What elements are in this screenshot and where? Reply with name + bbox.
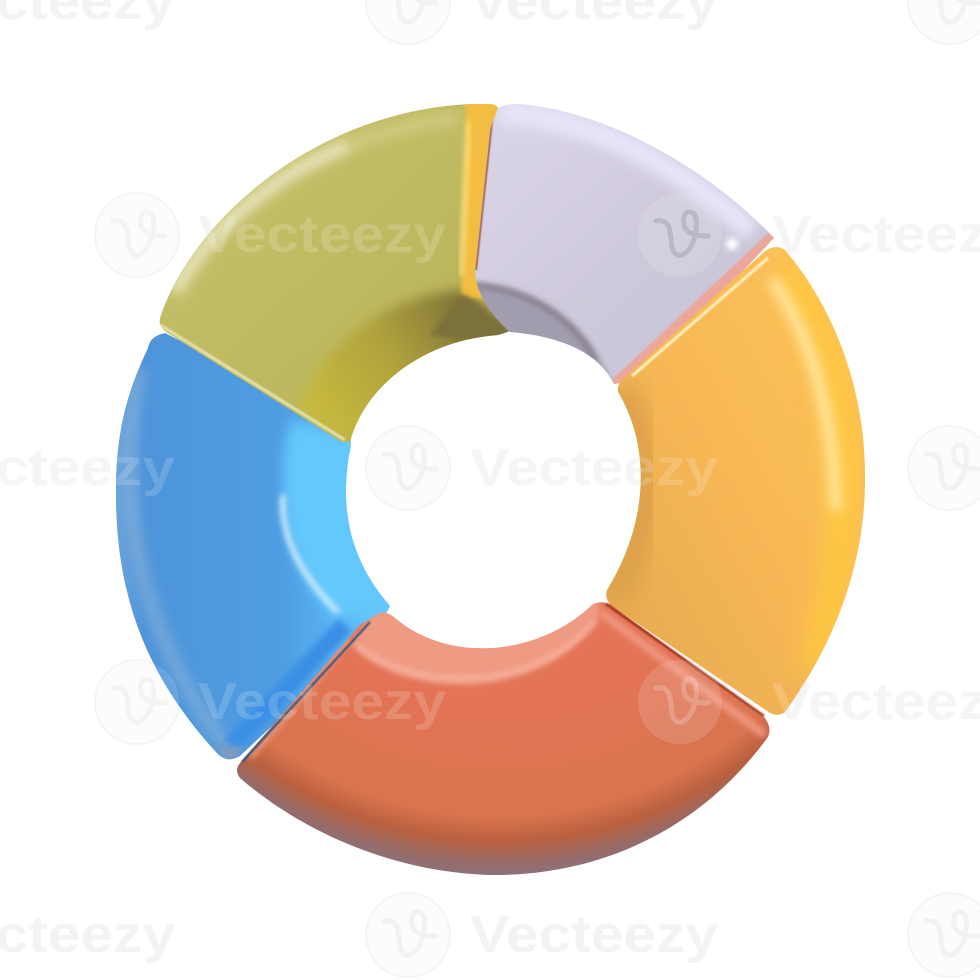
watermarks over donut: Vecteezy [470,439,718,497]
watermarks on background: Vecteezy [470,439,718,497]
watermarks over donut: Vecteezy [198,673,446,731]
segment: olive [150,95,520,445]
watermarks on background: Vecteezy [198,206,446,264]
dark gap: coral and yellow [606,604,764,716]
segment: blue [110,330,400,765]
watermarks on background: Vecteezy [470,906,718,964]
watermarks on background: Vecteezy [198,673,446,731]
dark gap: blue and coral [242,622,370,762]
segment: lavender [475,104,774,384]
segment: coral [230,595,775,880]
watermarks over donut [0,193,980,744]
watermarks over donut: Vecteezy [198,206,446,264]
segment: yellow [600,240,870,720]
